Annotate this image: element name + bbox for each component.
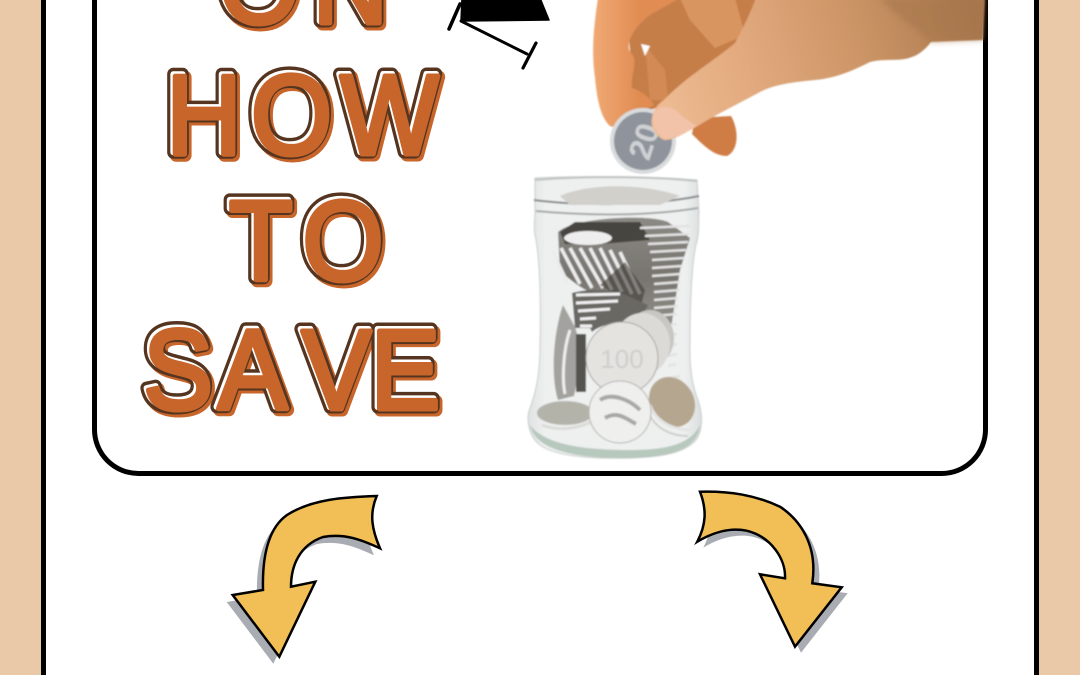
arrow body	[233, 496, 380, 657]
illustration: jar of coins: 100	[600, 344, 644, 374]
title word: SAVE: SAVE	[142, 306, 438, 432]
title word: SAVE: SAVE	[144, 309, 441, 435]
arrow body	[697, 492, 842, 647]
title word: HOW: HOW	[165, 51, 437, 177]
arrow shadow	[703, 498, 848, 653]
large 100 coin	[626, 310, 674, 366]
icon: graduation cap fragment	[449, 0, 549, 68]
right coin stack	[640, 226, 690, 378]
index finger	[593, 0, 680, 127]
jar body	[528, 177, 702, 458]
title word: HOW: HOW	[165, 51, 437, 177]
diagonal coin stack	[552, 248, 640, 294]
title word: SAVE: SAVE	[142, 306, 438, 432]
title word: TO: TO	[230, 180, 384, 306]
curled lower finger	[692, 116, 737, 156]
title word: TO: TO	[229, 179, 384, 305]
coin	[610, 108, 676, 174]
jar neck rings	[534, 196, 699, 204]
arrow: left curved down arrow	[227, 496, 380, 664]
thumb and back of hand	[652, 0, 985, 140]
brown coin	[640, 368, 704, 436]
title word: TO: TO	[227, 177, 382, 303]
left bottom coin	[537, 401, 593, 425]
illustration: jar of coins	[528, 177, 704, 458]
title word: HOW: HOW	[167, 53, 439, 179]
middle flat coins	[572, 290, 648, 332]
arrow shadow	[227, 503, 374, 664]
coin: 20	[621, 119, 667, 164]
jar base	[530, 425, 700, 458]
left edge coins	[554, 305, 578, 400]
title word: TO: TO	[227, 177, 382, 303]
thumbnail	[653, 107, 696, 139]
front coin	[589, 381, 651, 443]
title word: HOW: HOW	[167, 54, 440, 180]
illustration: hand dropping coin	[593, 0, 985, 174]
arrow: right curved down arrow	[697, 492, 848, 653]
wrist shading	[880, 0, 985, 42]
panel: rounded title box	[94, 0, 986, 474]
upper coin stack	[558, 218, 690, 335]
inner curled fingers	[625, 0, 760, 110]
title: On how to save	[142, 0, 441, 435]
title word: SAVE: SAVE	[144, 308, 440, 434]
